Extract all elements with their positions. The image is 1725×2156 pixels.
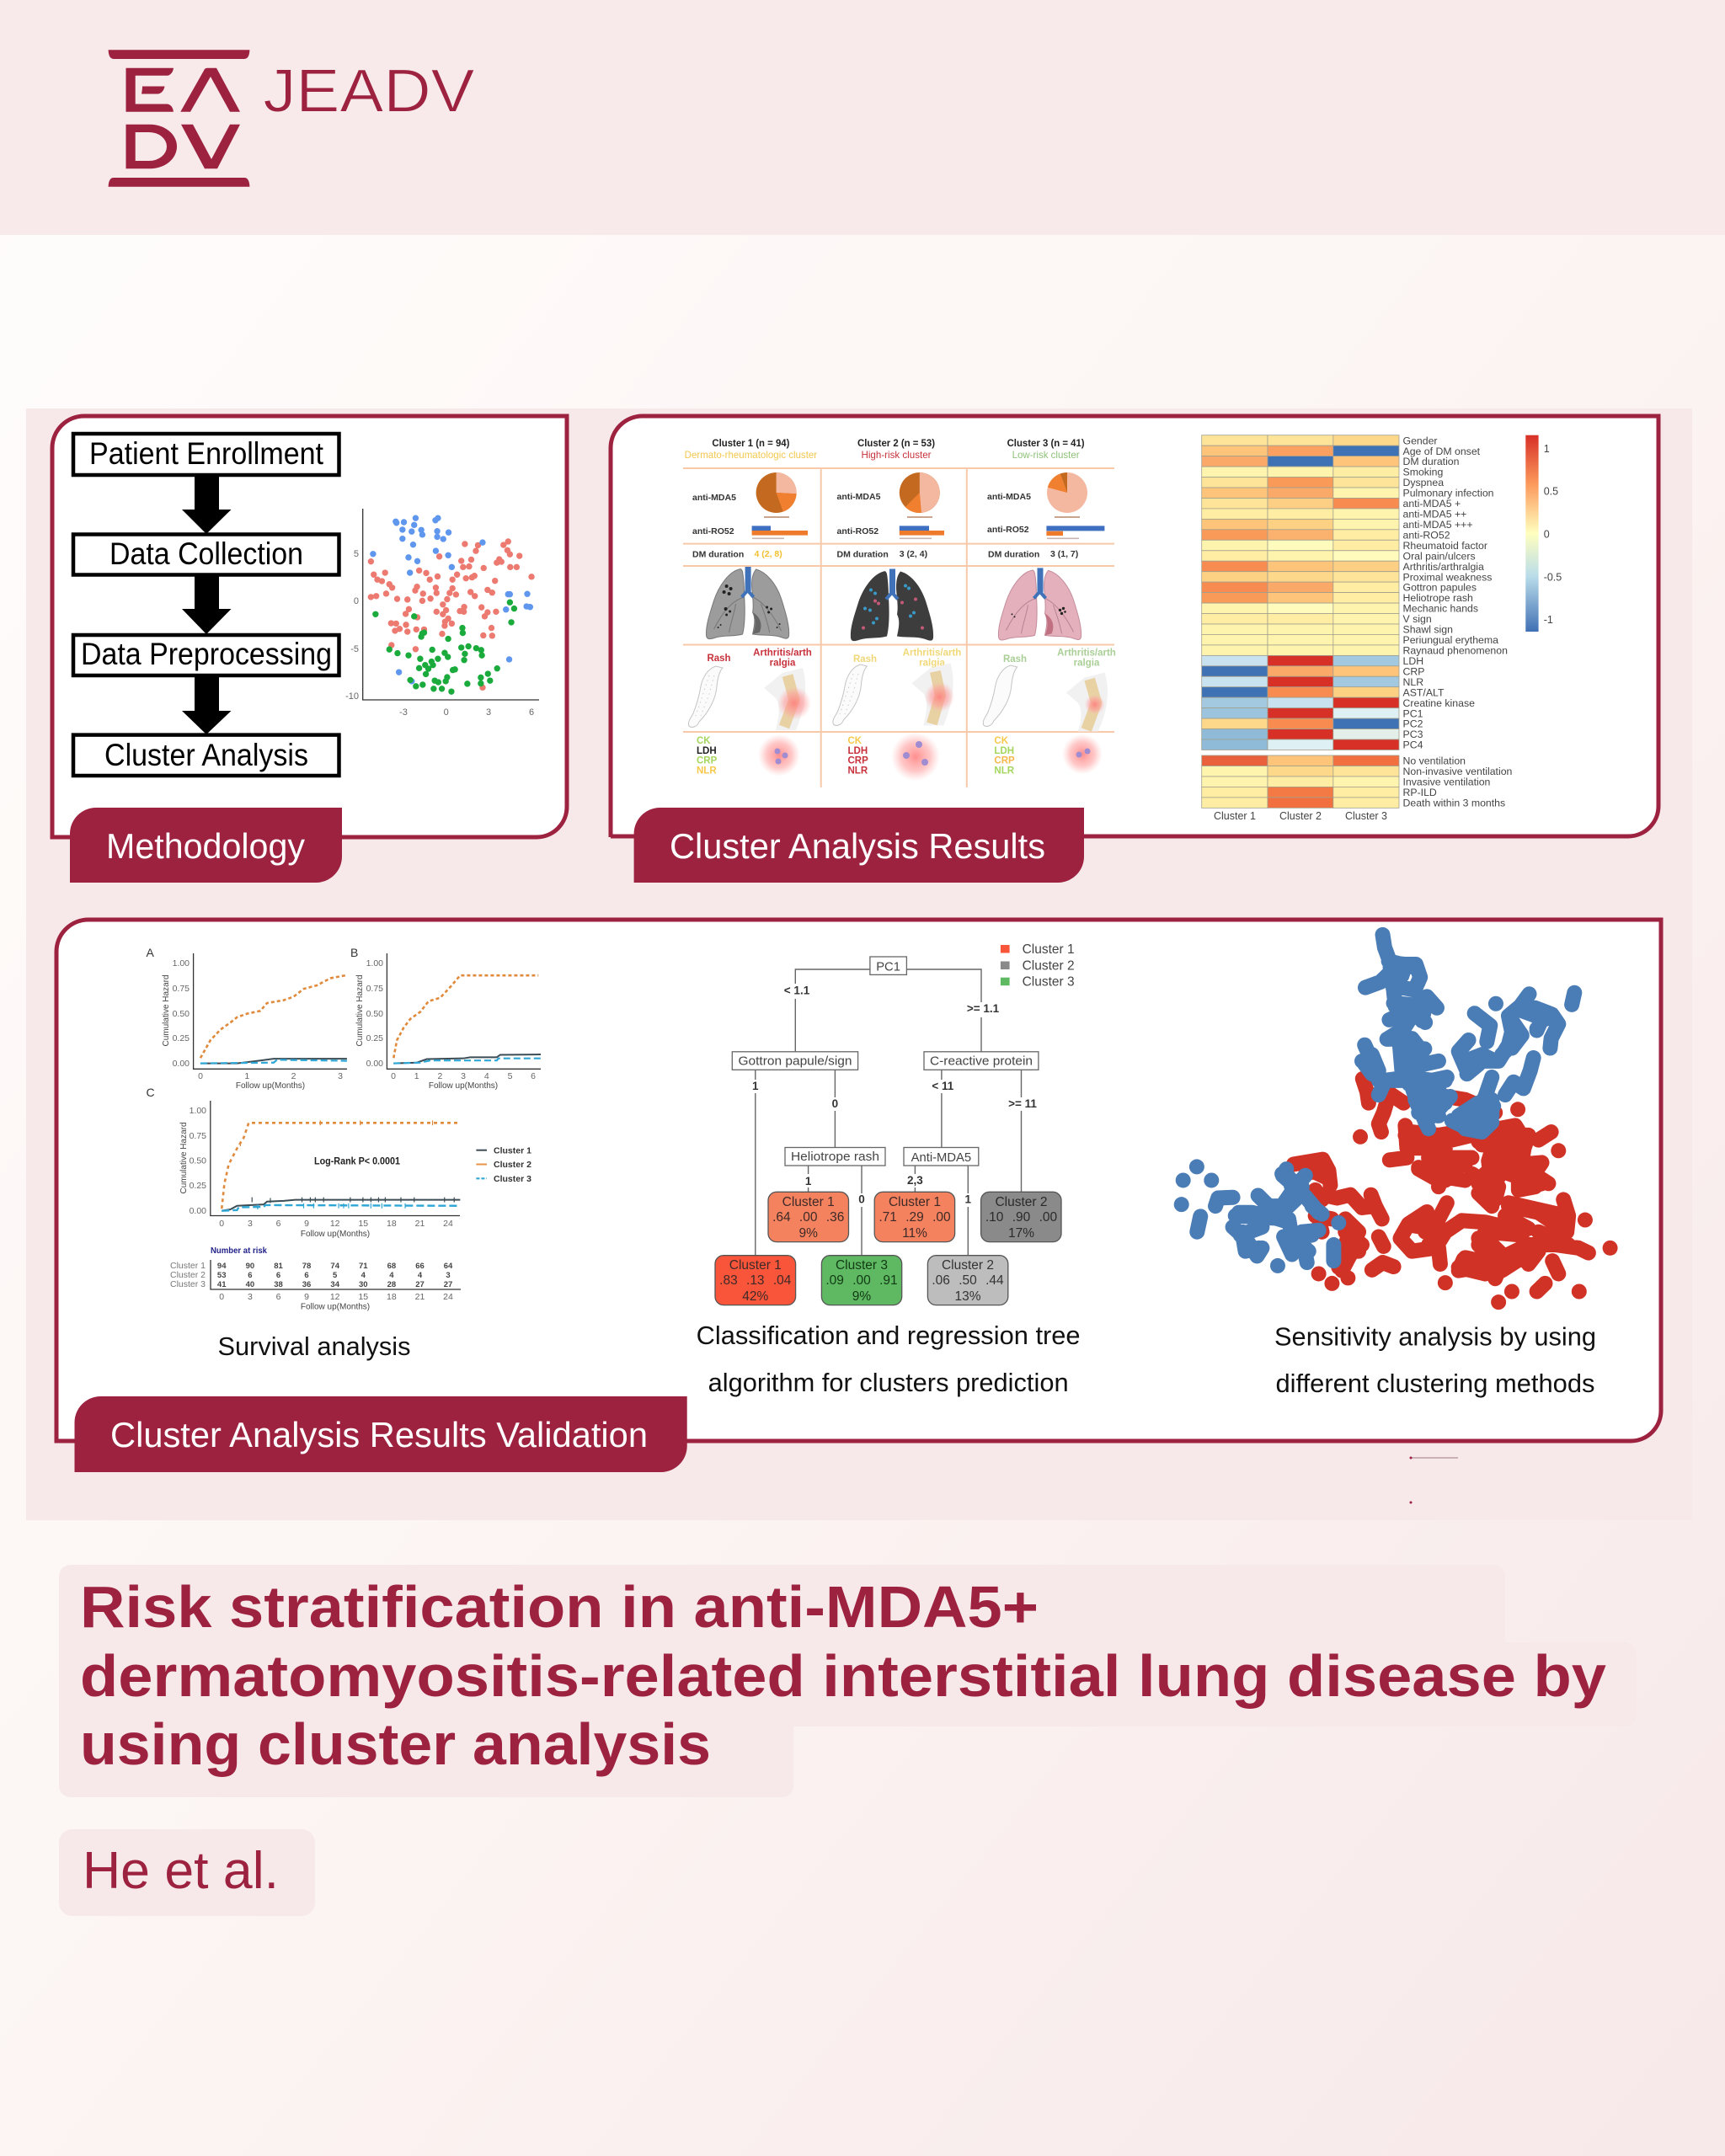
- icon: lung cluster 2: [851, 569, 933, 641]
- cluster headers: Dermato-rheumatologic cluster: [685, 449, 817, 461]
- tree nodes: Anti-MDA5: [911, 1151, 971, 1165]
- tree leaf: cluster 1 64: [768, 1192, 849, 1242]
- icon: knee cluster 3: [1066, 672, 1108, 731]
- heatmap row labels: Oral pain/ulcers: [1403, 550, 1476, 562]
- chart C: Cumulative Hazard: [179, 1122, 189, 1194]
- cluster headers: Low-risk cluster: [1012, 449, 1080, 461]
- panel: Cluster Analysis Results Validation: [56, 920, 1661, 1472]
- survival legend: Cluster 2: [494, 1160, 531, 1170]
- tree nodes: PC1: [876, 960, 900, 974]
- flowchart: [73, 434, 339, 776]
- title: dermatomyositis-related interstitial lung disease by: [80, 1643, 1606, 1709]
- logo: EADV emblem: [109, 50, 249, 187]
- chart B: Cumulative Hazard: [355, 974, 365, 1047]
- lab markers: LDH: [847, 746, 868, 756]
- tree branch labels: 0: [858, 1193, 865, 1206]
- tree nodes: Gottron papule/sign: [738, 1054, 852, 1068]
- survival legend: Cluster 1: [494, 1145, 531, 1155]
- scatter plot: t-SNE clusters: 0: [444, 707, 449, 718]
- tree nodes: C-reactive protein: [930, 1054, 1033, 1068]
- heatmap column labels: [1214, 810, 1387, 822]
- heading tab: Cluster Analysis Results: [634, 808, 1084, 883]
- flowchart: Patient Enrollment: [89, 436, 324, 471]
- heatmap row labels: Proximal weakness: [1403, 571, 1492, 583]
- heading tab: Methodology: [70, 808, 342, 883]
- tree leaf: cluster 3: 9%: [852, 1289, 871, 1304]
- number at risk table: 5: [333, 1271, 338, 1280]
- number at risk table: 28: [387, 1280, 396, 1289]
- tree leaf: cluster 1 71: Cluster 1: [889, 1195, 941, 1209]
- scatter plot: t-SNE clusters: 0: [354, 596, 359, 606]
- heatmap colour legend: 0: [1544, 528, 1550, 540]
- number at risk table: 4: [361, 1271, 366, 1280]
- chart A: [147, 946, 347, 1091]
- chart A: 0.00: [173, 1059, 190, 1069]
- number at risk table: 40: [246, 1280, 254, 1289]
- tree branch labels: < 1.1: [784, 985, 810, 997]
- heading tab: Validation: Cluster Analysis Results Validation: [110, 1415, 648, 1454]
- lab markers: CRP: [847, 756, 868, 766]
- symptom labels: ralgia: [770, 658, 796, 668]
- survival analysis charts: [147, 946, 541, 1312]
- number at risk table: 78: [302, 1262, 311, 1271]
- row labels: antibodies and duration: 4 (2, 8): [755, 549, 782, 559]
- chart B: 1: [414, 1071, 419, 1081]
- heatmap row labels: anti-MDA5 +++: [1403, 519, 1473, 531]
- heading tab: Methodology: Methodology: [106, 826, 305, 866]
- number at risk table: 81: [274, 1262, 283, 1271]
- heatmap row labels: Non-invasive ventilation: [1403, 766, 1513, 777]
- chart C: 21: [415, 1219, 425, 1229]
- tree leaf: cluster 2 10: .10 .90 .00: [985, 1210, 1058, 1225]
- chart B: 5: [508, 1071, 513, 1081]
- number at risk table: 24: [443, 1292, 453, 1302]
- chart C: 6: [276, 1219, 281, 1229]
- tree leaf: cluster 2 06: 13%: [954, 1289, 981, 1304]
- number at risk table: 34: [330, 1280, 340, 1289]
- lab markers: CK: [697, 736, 711, 746]
- number at risk table: [170, 1246, 461, 1312]
- row labels: antibodies and duration: 3 (1, 7): [1050, 549, 1078, 559]
- tree legend: Cluster 1: [1023, 942, 1075, 957]
- icon: knee cluster 2: [911, 663, 954, 725]
- heatmap row labels: Arthritis/arthralgia: [1403, 561, 1484, 573]
- tree branch labels: 0: [832, 1097, 838, 1110]
- heatmap row labels: Raynaud phenomenon: [1403, 645, 1508, 657]
- number at risk table: Follow up(Months): [301, 1303, 370, 1312]
- chart B: [350, 946, 541, 1091]
- tree leaf: cluster 2 06: .06 .50 .44: [932, 1273, 1004, 1288]
- heatmap row labels: Mechanic hands: [1403, 603, 1478, 615]
- symptom labels: ralgia: [1074, 658, 1100, 668]
- tree leaf: cluster 1 83: Cluster 1: [729, 1258, 782, 1273]
- heatmap colour legend: 1: [1544, 443, 1550, 455]
- number at risk table: 12: [330, 1292, 340, 1302]
- tree leaf: cluster 1 71: 11%: [902, 1226, 927, 1241]
- heatmap row labels: LDH: [1403, 655, 1423, 667]
- chart C: 0.25: [190, 1181, 206, 1191]
- caption: classification tree: Classification and regression tree: [697, 1321, 1081, 1350]
- number at risk table: 6: [276, 1271, 280, 1280]
- row labels: antibodies and duration: anti-RO52: [692, 526, 734, 536]
- scatter plot: t-SNE clusters: -3: [399, 707, 408, 718]
- sensitivity scatter plot: [1182, 935, 1610, 1302]
- heatmap colour legend: -0.5: [1544, 571, 1562, 583]
- number at risk table: 6: [248, 1271, 253, 1280]
- chart C: 0.50: [190, 1155, 206, 1166]
- scatter plot: t-SNE clusters: -10: [345, 691, 359, 702]
- title highlight: [59, 1565, 1637, 1797]
- tree branch labels: 1: [805, 1175, 812, 1187]
- number at risk table: 41: [217, 1280, 227, 1289]
- lab markers: [697, 736, 1015, 776]
- heatmap row labels: Gottron papules: [1403, 582, 1477, 594]
- tree legend: Cluster 3: [1023, 975, 1075, 990]
- heatmap row labels: No ventilation: [1403, 755, 1466, 767]
- number at risk table: Number at risk: [211, 1246, 267, 1256]
- bar charts: anti-RO52: [752, 526, 1104, 539]
- icon: knee cluster 1: [764, 668, 811, 730]
- chart A: 2: [291, 1071, 296, 1081]
- number at risk table: 90: [246, 1262, 254, 1271]
- number at risk table: 3: [446, 1271, 451, 1280]
- lab markers: CRP: [994, 756, 1015, 766]
- chart B: Follow up(Months): [429, 1081, 498, 1091]
- heatmap colour legend: -1: [1544, 614, 1553, 626]
- scatter plot: t-SNE clusters: [345, 509, 539, 718]
- chart A: 3: [338, 1071, 343, 1081]
- heatmap row labels: Pulmonary infection: [1403, 488, 1494, 499]
- chart B: 0.75: [366, 984, 383, 994]
- number at risk table: 38: [274, 1280, 283, 1289]
- number at risk table: 71: [359, 1262, 368, 1271]
- symptom labels: Arthritis/arth: [903, 648, 961, 659]
- heatmap row labels: Periungual erythema: [1403, 634, 1498, 646]
- heatmap: [1202, 435, 1562, 822]
- chart C: 18: [387, 1219, 397, 1229]
- heading tab: Cluster Analysis Results: Cluster Analysis Results: [670, 826, 1045, 866]
- lab markers: CK: [994, 736, 1009, 746]
- title: using cluster analysis: [80, 1711, 711, 1777]
- caption: sensitivity analysis: different clustering methods: [1275, 1369, 1595, 1398]
- number at risk table: 53: [217, 1271, 226, 1280]
- author: He et al.: [83, 1842, 279, 1900]
- heatmap row labels: anti-MDA5 +: [1403, 498, 1461, 510]
- heatmap row labels: PC4: [1403, 739, 1423, 751]
- symptom labels: Rash: [1003, 654, 1027, 664]
- heading tab: Validation: [74, 1396, 687, 1472]
- chart B: 3: [461, 1071, 466, 1081]
- tree leaf: cluster 1 71: [874, 1192, 955, 1242]
- tree leaf: cluster 3: [821, 1256, 902, 1305]
- tree branch labels: >= 11: [1008, 1097, 1037, 1110]
- decision tree: [715, 942, 1075, 1305]
- icons: arms with rash: [688, 664, 1017, 727]
- number at risk table: 9: [304, 1292, 309, 1302]
- tree leaf: cluster 1 71: .71 .29 .00: [879, 1210, 951, 1225]
- caption: sensitivity analysis: [1274, 1321, 1596, 1398]
- number at risk table: 36: [302, 1280, 311, 1289]
- chart A: 0: [198, 1071, 203, 1081]
- caption: survival analysis: Survival analysis: [217, 1331, 411, 1361]
- row labels: antibodies and duration: anti-RO52: [837, 526, 879, 536]
- chart C: 15: [358, 1219, 368, 1229]
- row labels: antibodies and duration: DM duration: [988, 549, 1039, 559]
- cluster summary table: [683, 437, 1116, 787]
- survival legend: [476, 1145, 531, 1184]
- figure background band: [26, 408, 1692, 1520]
- chart A: 0.25: [173, 1033, 190, 1043]
- title: Risk stratification in anti-MDA5+: [80, 1574, 1039, 1640]
- chart B: 0: [391, 1071, 396, 1081]
- heatmap row labels: DM duration: [1403, 456, 1460, 467]
- number at risk table: 30: [359, 1280, 368, 1289]
- heatmap row labels: PC2: [1403, 718, 1423, 730]
- heatmap row labels: Age of DM onset: [1403, 446, 1481, 457]
- cluster headers: Cluster 3 (n = 41): [1007, 437, 1085, 449]
- number at risk table: 27: [415, 1280, 425, 1289]
- row labels: antibodies and duration: DM duration: [692, 549, 744, 559]
- chart B: B: [350, 946, 358, 959]
- number at risk table: 68: [387, 1262, 396, 1271]
- chart B: 0.00: [366, 1059, 383, 1069]
- tree branch labels: 1: [965, 1193, 972, 1206]
- chart B: 2: [437, 1071, 442, 1081]
- number at risk table: 18: [387, 1292, 397, 1302]
- survival legend: Cluster 3: [494, 1174, 531, 1184]
- tree leaf: cluster 3: .09 .00 .91: [825, 1273, 898, 1288]
- scatter plot: t-SNE clusters: 3: [486, 707, 491, 718]
- chart C: 0: [219, 1219, 224, 1229]
- symptom labels: Rash: [853, 654, 877, 664]
- cluster headers: [685, 437, 1085, 461]
- chart A: Follow up(Months): [236, 1081, 305, 1091]
- chart C: 0.75: [190, 1131, 206, 1141]
- heatmap row labels: CRP: [1403, 665, 1424, 677]
- caption: classification tree: [697, 1321, 1081, 1397]
- chart C: 1.00: [190, 1106, 206, 1116]
- panel: Methodology: [52, 416, 567, 883]
- number at risk table: Cluster 2: [170, 1270, 206, 1280]
- number at risk table: 3: [248, 1292, 253, 1302]
- chart C: 3: [248, 1219, 253, 1229]
- tree legend: [1001, 942, 1075, 990]
- lab markers: NLR: [697, 766, 717, 776]
- chart A: 1: [244, 1071, 249, 1081]
- symptom labels: ralgia: [919, 658, 945, 668]
- tree leaf: cluster 1 64: .64 .00 .36: [772, 1210, 844, 1225]
- heatmap row labels: anti-MDA5 ++: [1403, 509, 1466, 520]
- number at risk table: 0: [219, 1292, 224, 1302]
- lab markers: NLR: [994, 766, 1015, 776]
- number at risk table: 15: [358, 1292, 368, 1302]
- row labels: antibodies and duration: anti-RO52: [987, 525, 1029, 535]
- number at risk table: 6: [276, 1292, 281, 1302]
- cluster headers: Cluster 2 (n = 53): [857, 437, 935, 449]
- tree branch labels: [750, 984, 1041, 1207]
- row labels: antibodies and duration: DM duration: [837, 549, 889, 559]
- chart C: Log-Rank P< 0.0001: [314, 1155, 400, 1167]
- chart C: Follow up(Months): [301, 1230, 370, 1239]
- tree leaf: cluster 3: Cluster 3: [836, 1258, 888, 1273]
- heatmap row labels: NLR: [1403, 676, 1423, 688]
- number at risk table: 94: [217, 1262, 227, 1271]
- heatmap row labels: Invasive ventilation: [1403, 776, 1491, 788]
- heatmap row labels: RP-ILD: [1403, 787, 1437, 798]
- panel: Cluster Analysis Results: [611, 416, 1658, 883]
- row labels: antibodies and duration: anti-MDA5: [987, 492, 1031, 502]
- scatter plot: t-SNE clusters: 5: [354, 549, 359, 559]
- chart B: 0.25: [366, 1033, 383, 1043]
- pie charts: anti-MDA5: [756, 472, 1087, 518]
- cluster headers: Cluster 1 (n = 94): [712, 437, 789, 449]
- tree legend: Cluster 2: [1023, 958, 1075, 974]
- heatmap row labels: Gender: [1403, 435, 1438, 446]
- chart C: 9: [304, 1219, 309, 1229]
- lab markers: CK: [847, 736, 862, 746]
- chart C: [147, 1086, 531, 1239]
- number at risk table: 64: [444, 1262, 453, 1271]
- lab markers: NLR: [847, 766, 868, 776]
- heatmap row labels: Shawl sign: [1403, 624, 1453, 636]
- chart C: C: [147, 1086, 155, 1099]
- heatmap column labels: Cluster 3: [1345, 810, 1387, 822]
- logo wordmark: JEADV: [263, 58, 475, 125]
- header band: [0, 0, 1725, 235]
- chart A: 0.75: [173, 984, 190, 994]
- icon: lung cluster 1: [706, 567, 789, 639]
- heatmap row labels: Rheumatoid factor: [1403, 540, 1487, 552]
- tree leaf: cluster 2 06: Cluster 2: [942, 1258, 994, 1273]
- tree nodes: [732, 957, 1039, 1166]
- chart C: 24: [443, 1219, 453, 1229]
- heatmap column labels: Cluster 1: [1214, 810, 1256, 822]
- heatmap row labels: [1403, 435, 1513, 808]
- number at risk table: 6: [304, 1271, 309, 1280]
- tree leaf: cluster 2 10: [981, 1192, 1061, 1242]
- chart B: 0.50: [366, 1009, 383, 1019]
- number at risk table: Cluster 1: [170, 1261, 206, 1271]
- row labels: antibodies and duration: anti-MDA5: [837, 492, 881, 502]
- tree leaf: cluster 1 64: 9%: [798, 1226, 818, 1241]
- tree branch labels: < 11: [932, 1080, 954, 1092]
- title: [80, 1574, 1606, 1777]
- tree leaf: cluster 1 64: Cluster 1: [782, 1195, 835, 1209]
- number at risk table: 21: [415, 1292, 425, 1302]
- chart B: 6: [531, 1071, 536, 1081]
- cluster headers: High-risk cluster: [861, 449, 932, 461]
- tree leaf: cluster 2 10: Cluster 2: [995, 1195, 1048, 1209]
- chart A: 0.50: [173, 1009, 190, 1019]
- author highlight: [59, 1829, 315, 1916]
- tree leaf: cluster 2 06: [927, 1256, 1008, 1305]
- heatmap colour legend: 0.5: [1544, 486, 1558, 498]
- heatmap row labels: AST/ALT: [1403, 686, 1445, 698]
- scatter plot: t-SNE clusters: -5: [350, 644, 359, 654]
- symptom labels: Arthritis/arth: [753, 648, 812, 659]
- lab markers: LDH: [697, 746, 717, 756]
- icons: inflammation glow: [758, 733, 1103, 782]
- lab markers: LDH: [994, 746, 1014, 756]
- tree branch labels: 1: [752, 1080, 759, 1092]
- number at risk table: 74: [330, 1262, 340, 1271]
- symptom labels: [707, 648, 1116, 668]
- tree leaf: cluster 2 10: 17%: [1008, 1226, 1034, 1241]
- symptom labels: Arthritis/arth: [1057, 648, 1116, 659]
- flowchart: Data Collection: [109, 536, 303, 571]
- symptom labels: Rash: [707, 654, 731, 664]
- tree branch labels: 2,3: [907, 1174, 923, 1187]
- chart B: 1.00: [366, 958, 383, 969]
- tree leaf: cluster 1 83: .83 .13 .04: [719, 1273, 792, 1288]
- number at risk table: 66: [415, 1262, 425, 1271]
- icon: lung cluster 3: [998, 568, 1081, 640]
- number at risk table: 27: [444, 1280, 452, 1289]
- row labels: antibodies and duration: 3 (2, 4): [900, 549, 927, 559]
- tree nodes: Heliotrope rash: [791, 1150, 879, 1164]
- flowchart: Data Preprocessing: [81, 637, 332, 671]
- chart B: 4: [484, 1071, 489, 1081]
- heatmap row labels: V sign: [1403, 613, 1432, 625]
- number at risk table: 4: [418, 1271, 423, 1280]
- chart A: Cumulative Hazard: [162, 974, 171, 1047]
- heatmap row labels: anti-RO52: [1403, 529, 1450, 541]
- chart C: 0.00: [190, 1206, 206, 1216]
- chart C: 12: [330, 1219, 340, 1229]
- heatmap row labels: Smoking: [1403, 467, 1444, 478]
- caption: classification tree: algorithm for clusters prediction: [708, 1368, 1069, 1397]
- number at risk table: Cluster 3: [170, 1279, 206, 1289]
- lab markers: CRP: [697, 756, 718, 766]
- flowchart: Cluster Analysis: [104, 738, 308, 772]
- heatmap row labels: Creatine kinase: [1403, 697, 1475, 709]
- number at risk table: 4: [389, 1271, 394, 1280]
- tree branch labels: >= 1.1: [967, 1002, 1000, 1015]
- heatmap colour legend: [1525, 435, 1562, 632]
- tree leaf: cluster 1 83: 42%: [742, 1289, 769, 1304]
- row labels: antibodies and duration: anti-MDA5: [692, 493, 736, 503]
- scatter plot: t-SNE clusters: 6: [529, 707, 534, 718]
- caption: sensitivity analysis: Sensitivity analysis by using: [1274, 1321, 1596, 1351]
- heatmap row labels: Death within 3 months: [1403, 797, 1505, 808]
- heatmap row labels: Heliotrope rash: [1403, 592, 1473, 604]
- row labels: antibodies and duration: [692, 492, 1078, 559]
- chart A: 1.00: [173, 958, 190, 969]
- tree leaf: cluster 1 83: [715, 1256, 796, 1305]
- heatmap column labels: Cluster 2: [1279, 810, 1322, 822]
- heatmap row labels: PC3: [1403, 728, 1423, 740]
- chart A: A: [147, 946, 155, 959]
- heatmap row labels: Dyspnea: [1403, 477, 1444, 488]
- heatmap row labels: PC1: [1403, 707, 1423, 719]
